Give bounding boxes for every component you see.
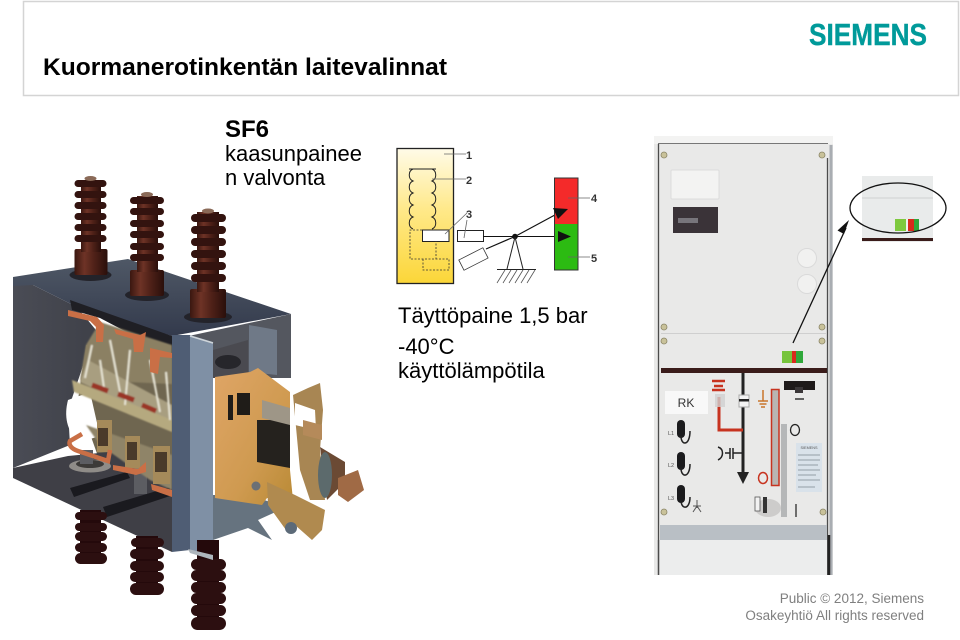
arrow: from panel to inset (793, 220, 849, 343)
side bracket (293, 383, 325, 500)
cable sockets L1 L2 L3: L1 (668, 431, 674, 437)
lock mechanism (755, 497, 781, 517)
lever and ground (458, 209, 566, 283)
mechanism plate (215, 368, 293, 505)
photo: load break switch unit (13, 176, 364, 630)
title: Kuormanerotinkentän laitevalinnat (43, 54, 447, 81)
bottle backing (78, 338, 172, 495)
bottom insulators (75, 510, 226, 630)
callout ellipse (850, 183, 946, 233)
diagram: pressure indicator schematic (397, 148, 598, 284)
RK label (665, 391, 708, 414)
top insulators (70, 176, 232, 323)
leaders and numbers: 4 (591, 193, 598, 205)
inset: indicator detail (862, 176, 933, 242)
cable sockets L1 L2 L3: L3 (668, 496, 674, 502)
text block: SF6 monitoring: n valvonta (225, 165, 326, 190)
footer: Osakeyhtiö All rights reserved (745, 608, 924, 623)
indicator: red and green (553, 178, 578, 270)
lower mechanism parts (267, 482, 325, 540)
handle (784, 381, 815, 399)
white gap behind bottle (66, 392, 100, 442)
round covers (798, 248, 816, 294)
label window (671, 170, 719, 199)
text block: filling pressure and temperature: -40°C (398, 334, 455, 359)
copper bars and contacts (68, 310, 172, 497)
header panel (24, 2, 958, 96)
tank (397, 148, 454, 284)
RK label: RK (678, 396, 694, 410)
cable sockets L1 L2 L3: L2 (668, 463, 674, 469)
left side panel (13, 285, 100, 468)
leaders and numbers: 3 (466, 209, 472, 221)
top plate (13, 259, 291, 336)
bottom plate (13, 452, 172, 552)
text block: filling pressure and temperature: Täyttöpaine 1,5 bar (398, 303, 588, 328)
small pressure indicator (782, 351, 803, 363)
leaders and numbers (432, 150, 598, 265)
data sheet: SIEMENS (800, 446, 818, 450)
cable sockets L1 L2 L3 (668, 420, 690, 507)
screws (661, 152, 826, 515)
rating plate (673, 207, 718, 233)
bottom rail (660, 525, 827, 540)
single line diagram (712, 373, 800, 517)
text block: filling pressure and temperature: käyttölämpötila (398, 358, 546, 383)
back panel behind mechanism (170, 314, 291, 378)
photo: switchgear panel front (654, 136, 833, 575)
metal column (172, 335, 190, 552)
dark opening under top plate (70, 300, 172, 356)
leaders and numbers: 5 (591, 253, 597, 265)
text block: SF6 monitoring: SF6 (225, 116, 269, 143)
disc and copper terminal (320, 447, 345, 500)
dark bar (661, 368, 827, 373)
footer: Public © 2012, Siemens (780, 591, 924, 606)
data sheet (796, 443, 822, 492)
text block: SF6 monitoring: kaasunpainee (225, 141, 362, 166)
text block: filling pressure and temperature (398, 303, 588, 383)
earth symbol (693, 500, 701, 512)
vacuum bottles (72, 322, 172, 490)
footer (745, 591, 924, 623)
leaders and numbers: 2 (466, 175, 472, 187)
base plates under mechanism (213, 495, 280, 540)
text block: SF6 monitoring (225, 116, 362, 190)
leaders and numbers: 1 (466, 150, 472, 162)
logo: Siemens: SIEMENS (809, 17, 927, 52)
